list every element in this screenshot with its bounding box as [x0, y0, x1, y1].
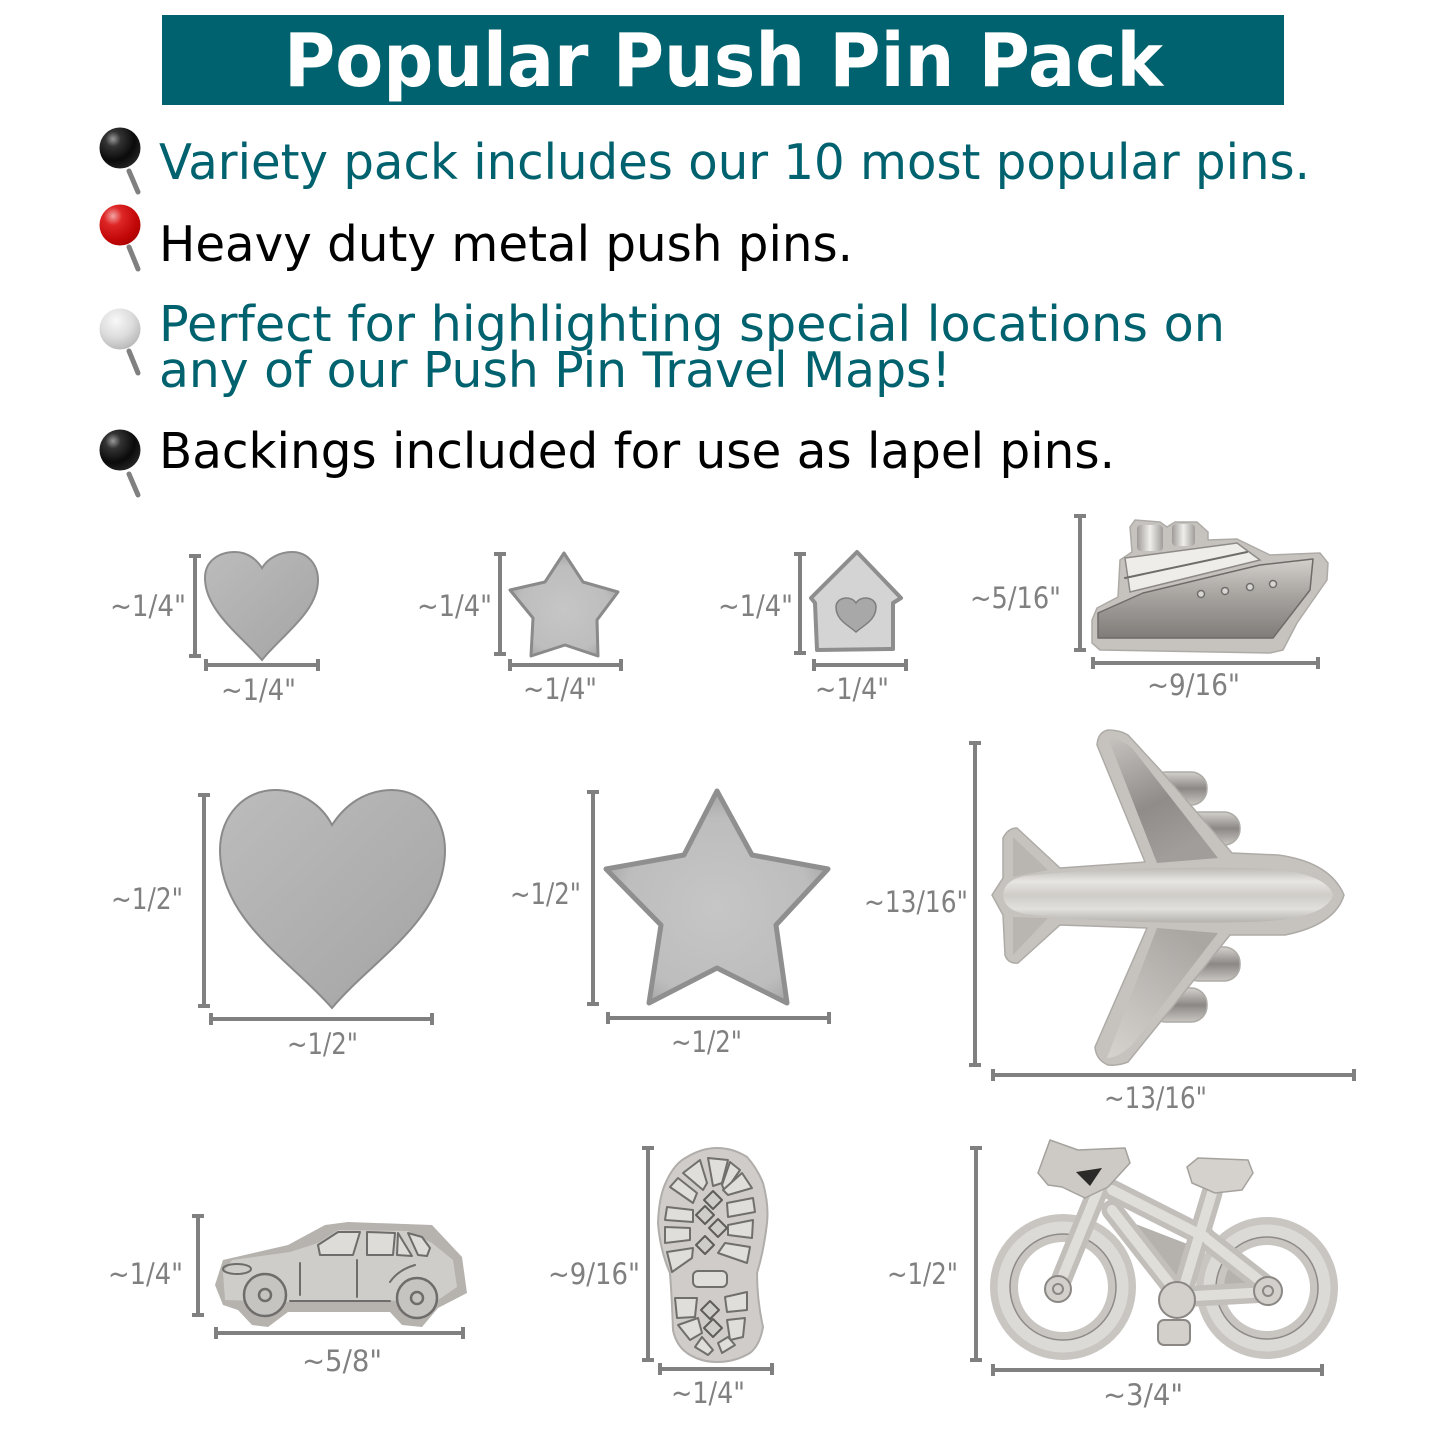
- plane tail: [1013, 837, 1048, 955]
- large star pin with dimensions: ~1/2": [671, 1025, 742, 1059]
- small house pin with dimensions: ~1/4": [718, 589, 793, 623]
- plane outline: [992, 730, 1344, 1065]
- small star pin with dimensions: ~1/4": [523, 672, 597, 706]
- title banner: Popular Push Pin Pack: [284, 18, 1165, 104]
- large heart pin with dimensions: [111, 790, 445, 1061]
- icon: black pin bullet: [100, 430, 140, 495]
- bullet text: heavy duty: Heavy duty metal push pins.: [159, 216, 853, 273]
- car details: [290, 1260, 415, 1301]
- large star pin with dimensions: ~1/2": [510, 877, 581, 911]
- bike handlebar: [1038, 1140, 1130, 1198]
- bullet text: backings: Backings included for use as lapel pins.: [159, 423, 1115, 480]
- car windows: [318, 1232, 430, 1256]
- boot tread: [665, 1158, 755, 1355]
- car pin with dimensions: ~1/4": [108, 1257, 183, 1291]
- plane engines: [1150, 772, 1240, 1022]
- bicycle pin with dimensions: [887, 1140, 1324, 1412]
- car pin with dimensions: ~5/8": [302, 1344, 382, 1378]
- boot sole pin with dimensions: ~9/16": [548, 1257, 640, 1291]
- small heart pin with dimensions: ~1/4": [221, 673, 296, 707]
- boot outline: [658, 1148, 768, 1362]
- small heart pin with dimensions: ~1/4": [110, 589, 186, 623]
- small house pin with dimensions: [718, 552, 906, 706]
- small star pin with dimensions: ~1/4": [417, 589, 492, 623]
- bullet text: perfect for highlighting: any of our Push Pin Travel Maps!: [159, 342, 951, 399]
- bicycle pin with dimensions: ~3/4": [1103, 1378, 1183, 1412]
- boot sole pin with dimensions: [548, 1148, 772, 1410]
- ship hull: [1098, 559, 1313, 638]
- car outline: [215, 1222, 467, 1327]
- airplane pin with dimensions: ~13/16": [864, 885, 968, 919]
- icon: red pin bullet: [100, 204, 140, 269]
- cruise ship pin with dimensions: ~5/16": [970, 581, 1061, 615]
- plane wings: [1108, 738, 1218, 863]
- airplane pin with dimensions: [864, 730, 1354, 1115]
- boot sole pin with dimensions: ~1/4": [671, 1376, 745, 1410]
- bike wheels: [1004, 1228, 1324, 1346]
- bullet text: perfect for highlighting: Perfect for highlighting special locations on: [159, 296, 1225, 353]
- bicycle pin with dimensions: ~1/2": [887, 1257, 958, 1291]
- icon: black pin bullet: [100, 128, 140, 192]
- airplane pin with dimensions: ~13/16": [1104, 1081, 1207, 1115]
- large heart pin with dimensions: ~1/2": [111, 882, 183, 916]
- bike hubs, crank and pedal: [1045, 1276, 1282, 1345]
- small star pin with dimensions: [417, 553, 621, 706]
- ship outline: [1092, 520, 1328, 653]
- car pin with dimensions: [108, 1216, 467, 1378]
- ship portholes: [1198, 580, 1276, 598]
- bike frame tubes: [1058, 1180, 1268, 1297]
- car wheels: [244, 1274, 437, 1318]
- bullet list: [100, 128, 1310, 495]
- small house pin with dimensions: ~1/4": [815, 672, 889, 706]
- cruise ship pin with dimensions: [970, 516, 1328, 702]
- cruise ship pin with dimensions: ~9/16": [1147, 668, 1240, 702]
- large heart pin with dimensions: ~1/2": [287, 1027, 358, 1061]
- large star pin with dimensions: [510, 791, 829, 1059]
- bike seat: [1187, 1158, 1253, 1193]
- small heart pin with dimensions: [110, 552, 318, 707]
- plane fuselage: [1003, 868, 1333, 923]
- bullet text: perfect for highlighting: [159, 296, 1225, 399]
- car body: [223, 1230, 457, 1302]
- ship funnels: [1137, 524, 1195, 551]
- icon: white pin bullet: [100, 308, 140, 373]
- ship superstructure: [1125, 543, 1260, 592]
- bike frame triangles: [1125, 1220, 1250, 1285]
- bullet text: variety pack: Variety pack includes our 10 most popular pins.: [159, 134, 1310, 191]
